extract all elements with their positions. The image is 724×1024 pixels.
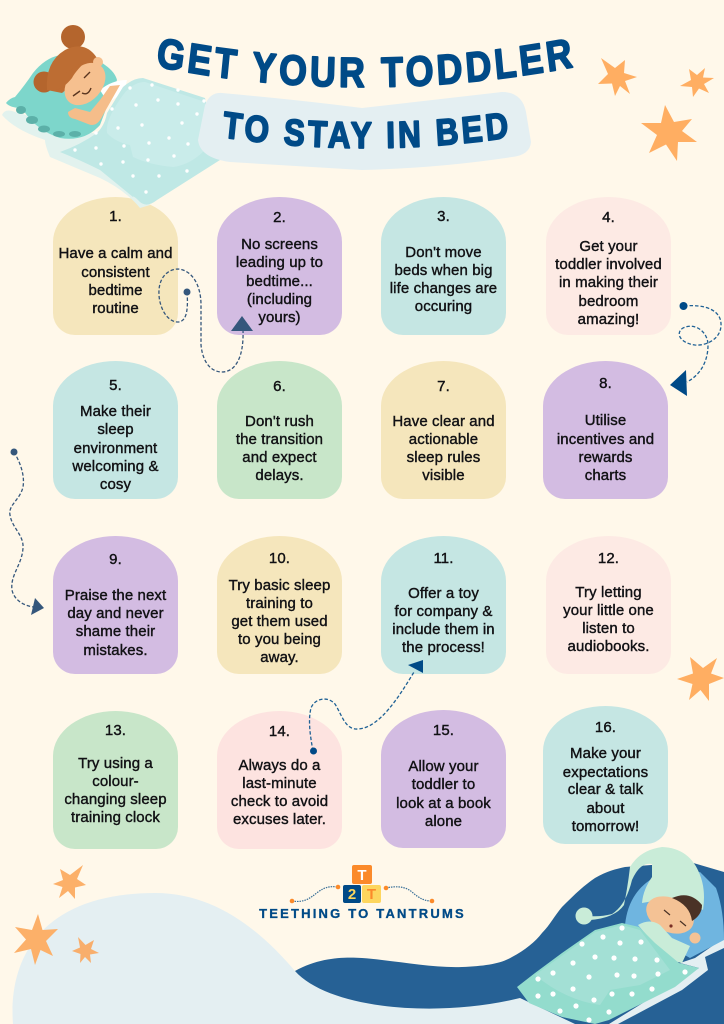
card 13: training clock (71, 809, 160, 826)
card 4: Get your (579, 238, 638, 255)
card 8: rewards (578, 449, 633, 466)
card 7: 7. (437, 378, 450, 395)
card 5: cosy (100, 476, 132, 493)
card 11: include them in (392, 621, 495, 638)
card 14: excuses later. (233, 811, 326, 828)
card 6: the transition (236, 431, 323, 448)
card 6: Don't rush (245, 413, 314, 430)
card 14: check to avoid (231, 793, 328, 810)
card 1: routine (92, 300, 139, 317)
card 16: clear & talk (568, 781, 644, 798)
card 6: 6. (273, 378, 286, 395)
card 12 (546, 536, 671, 674)
card 9: mistakes. (83, 642, 148, 659)
card 6: and expect (242, 449, 317, 466)
card 2: No screens (241, 236, 318, 253)
card 2: 2. (273, 209, 286, 226)
card 8: incentives and (557, 431, 654, 448)
card 5 (53, 361, 178, 499)
card 12: Try letting (575, 584, 642, 601)
arrow: step 4 to step 8 (670, 302, 721, 396)
card 9: shame their (76, 623, 155, 640)
card 10 (217, 536, 342, 674)
card 10: to you being (238, 631, 321, 648)
card 13: changing sleep (64, 791, 167, 808)
card 2: leading up to (236, 254, 323, 271)
star: right middle (677, 657, 724, 701)
icon: sleeping girl under blanket (2, 25, 220, 208)
card 6: delays. (255, 467, 304, 484)
card 12: 12. (598, 550, 619, 567)
card 8 (543, 361, 668, 499)
title band (198, 92, 531, 170)
card 9 (53, 536, 178, 674)
card 5: environment (74, 440, 158, 457)
arrow: step 1 to step 2 (159, 269, 253, 372)
card 13 (53, 711, 178, 849)
card 9: Praise the next (65, 587, 167, 604)
card 5: welcoming & (71, 458, 159, 475)
card 16: Make your (570, 745, 641, 762)
logo: Teething to Tantrums: TEETHING TO TANTRUMS (259, 906, 466, 921)
card 11 (381, 536, 506, 674)
card 15: toddler to (412, 776, 475, 793)
card 4: amazing! (578, 311, 639, 328)
arrow: step 8 to step 9 (10, 448, 44, 615)
card 7: sleep rules (407, 449, 480, 466)
card 7: Have clear and (392, 413, 495, 430)
card 3 (381, 197, 506, 335)
title line 2: TO STAY IN BED (224, 110, 508, 149)
card 3: Don't move (405, 244, 482, 261)
card 15: Allow your (408, 758, 479, 775)
card 6 (217, 361, 342, 499)
card 3: life changes are (390, 280, 497, 297)
card 13: colour- (92, 773, 139, 790)
card 16: expectations (563, 764, 648, 781)
star: bottom left small (53, 865, 86, 899)
card 9: 9. (109, 551, 122, 568)
card 7: actionable (409, 431, 478, 448)
star: bottom left large (14, 914, 58, 965)
card 11: Offer a toy (408, 585, 479, 602)
card 15: alone (425, 813, 462, 830)
card 3: 3. (437, 208, 450, 225)
logo: Teething to Tantrums: 2 (348, 886, 356, 903)
card 3: beds when big (394, 262, 493, 279)
card 10: training to (246, 595, 313, 612)
card 8: charts (585, 467, 626, 484)
card 16: tomorrow! (572, 818, 639, 835)
card 8: 8. (599, 375, 612, 392)
icon: sleeping boy under blanket (517, 847, 724, 1024)
card 7 (381, 361, 506, 499)
card 16: about (586, 800, 625, 817)
card 15: look at a book (396, 795, 491, 812)
title line 1: GET YOUR TODDLER (158, 38, 574, 88)
card 12: your little one (563, 602, 654, 619)
card 14: last-minute (242, 775, 317, 792)
card 5: sleep (97, 421, 134, 438)
card 7: visible (422, 467, 465, 484)
card 16 (543, 706, 668, 844)
card 2: (including (247, 291, 312, 308)
logo: Teething to Tantrums: T (357, 867, 367, 884)
card 5: Make their (80, 403, 151, 420)
arrow: step 14 to step 11 (310, 660, 423, 754)
card 10: away. (260, 649, 299, 666)
dark blue wave (295, 862, 724, 1024)
card 12: listen to (582, 620, 635, 637)
card 10: Try basic sleep (229, 577, 330, 594)
pale blue hill (13, 893, 575, 1024)
card 10: 10. (269, 550, 290, 567)
card 9: day and never (67, 605, 164, 622)
card 3: occuring (415, 298, 472, 315)
star: bottom left tiny (72, 937, 99, 963)
card 15 (381, 710, 506, 848)
card 1: bedtime (88, 282, 143, 299)
card 2: yours) (258, 309, 301, 326)
card 16: 16. (595, 719, 616, 736)
card 1 (53, 197, 178, 335)
card 8: Utilise (585, 412, 626, 429)
card 2 (217, 197, 342, 335)
card 4 (546, 197, 671, 335)
card 15: 15. (433, 722, 454, 739)
card 1: Have a calm and (58, 245, 173, 262)
card 11: 11. (433, 550, 454, 567)
card 11: for company & (394, 603, 493, 620)
card 13: 13. (105, 722, 126, 739)
card 13: Try using a (78, 755, 153, 772)
card 2: bedtime... (246, 273, 313, 290)
star: top right 3 (641, 105, 697, 161)
star: top right 2 (680, 68, 714, 97)
card 1: consistent (81, 264, 150, 281)
card 14: 14. (269, 723, 290, 740)
card 4: toddler involved (555, 256, 662, 273)
card 1: 1. (109, 208, 122, 225)
card 12: audiobooks. (568, 638, 650, 655)
card 14 (217, 711, 342, 849)
card 11: the process! (402, 639, 485, 656)
logo: Teething to Tantrums (259, 865, 466, 921)
card 5: 5. (109, 377, 122, 394)
card 10: get them used (231, 613, 328, 630)
card 14: Always do a (239, 757, 321, 774)
card 4: bedroom (579, 293, 638, 310)
logo: Teething to Tantrums: T (367, 886, 376, 903)
star: top right 1 (598, 58, 637, 96)
card 4: 4. (602, 209, 615, 226)
card 4: in making their (559, 274, 658, 291)
